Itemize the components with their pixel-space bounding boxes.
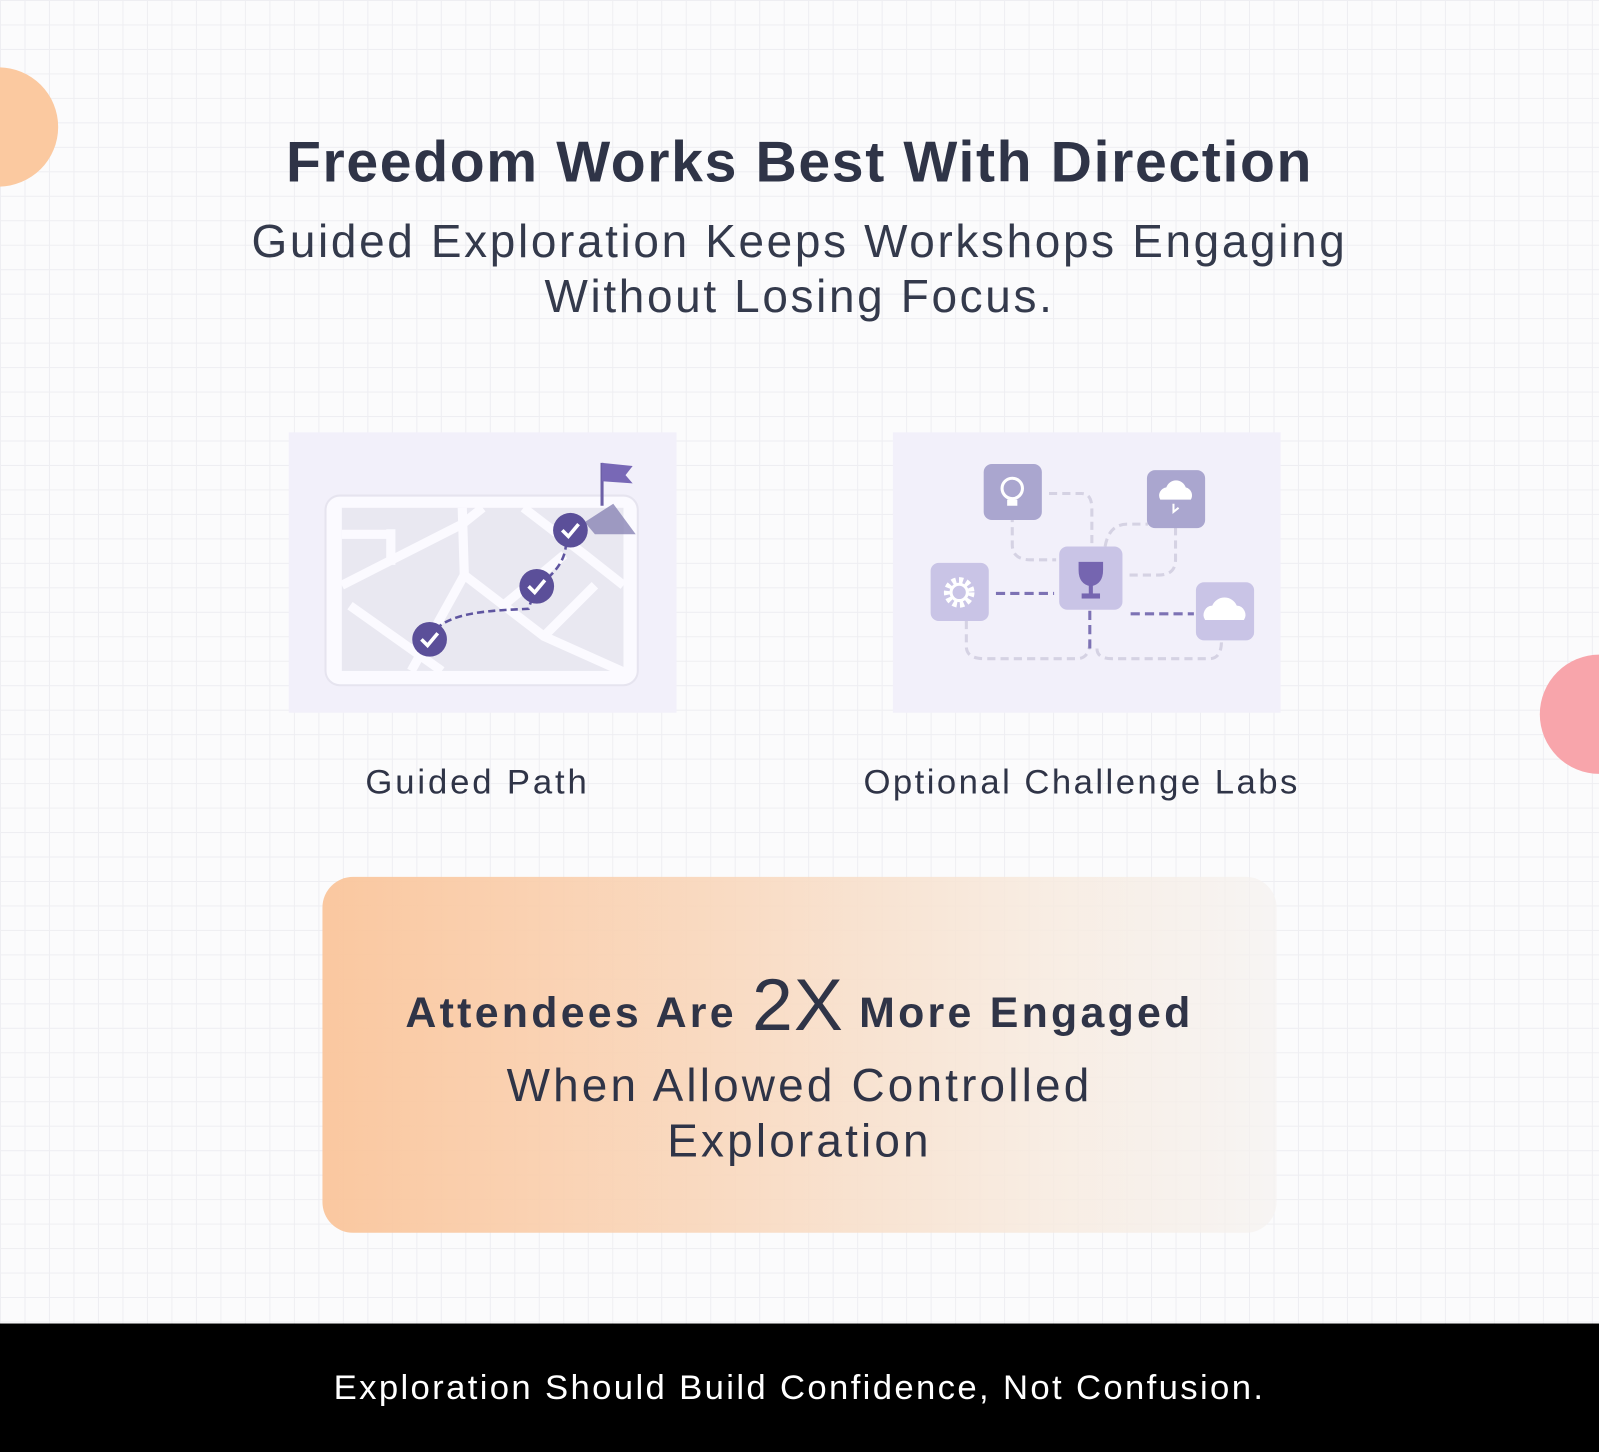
panel: guided path illustration (289, 432, 677, 713)
map (326, 496, 638, 685)
stat subtext (506, 1059, 1092, 1166)
title: Freedom Works Best With Direction (286, 129, 1313, 194)
icon: gear (931, 563, 989, 621)
stat subtext: Exploration (667, 1114, 932, 1166)
decorative circle: right pink (1540, 655, 1599, 774)
icon: lightbulb (984, 464, 1042, 520)
panel: challenge labs illustration (893, 432, 1281, 713)
footer bar (0, 1324, 1599, 1452)
icon: cloud (1196, 582, 1254, 640)
subtitle: Guided Exploration Keeps Workshops Engaging (251, 215, 1347, 267)
footer text: Exploration Should Build Confidence, Not Confusion. (334, 1368, 1265, 1407)
label: guided path: Guided Path (365, 763, 590, 801)
flag (585, 463, 636, 534)
label: optional challenge labs: Optional Challenge Labs (863, 763, 1300, 801)
icon: trophy (1059, 547, 1122, 610)
decorative circle: top-left peach (0, 67, 58, 187)
icon: cloud hand (1147, 470, 1205, 528)
callout: engagement stat (322, 877, 1277, 1233)
path (412, 513, 588, 657)
stat headline: Attendees Are 2X More Engaged (405, 965, 1194, 1046)
subtitle (251, 215, 1347, 322)
stat subtext: When Allowed Controlled (507, 1059, 1092, 1111)
subtitle: Without Losing Focus. (544, 270, 1055, 322)
